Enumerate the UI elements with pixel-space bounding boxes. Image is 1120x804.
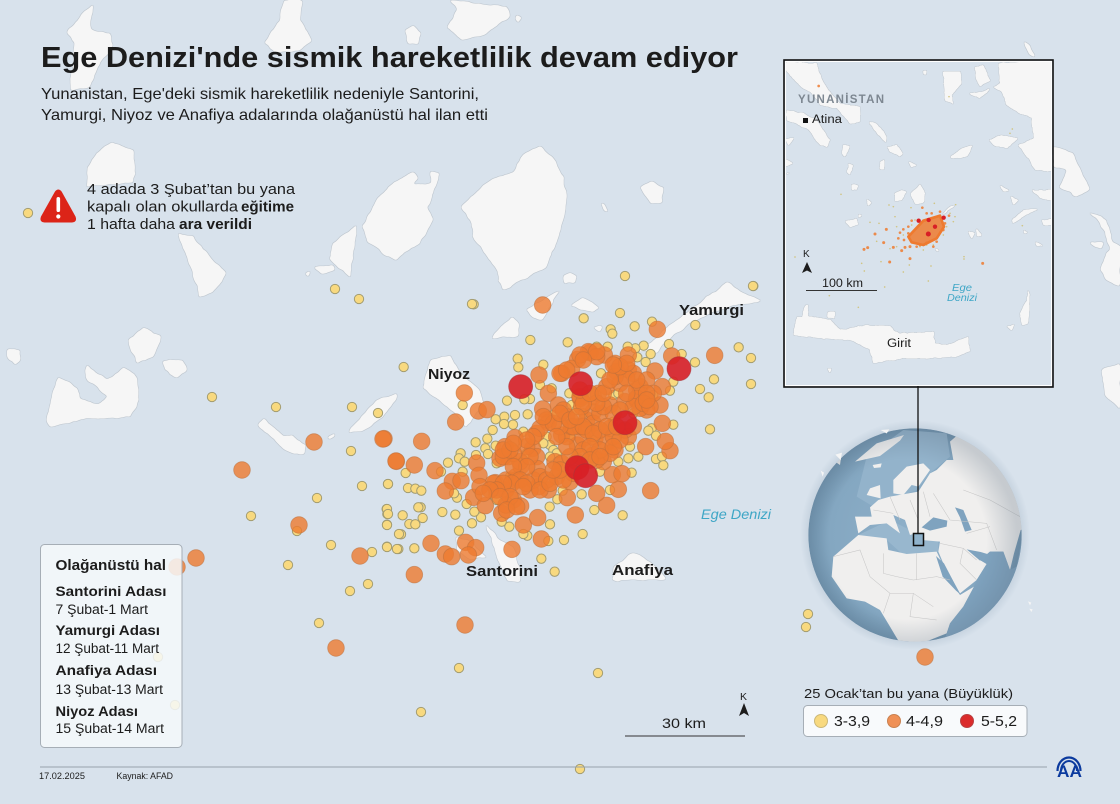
legend title: 25 Ocak’tan bu yana (Büyüklük) — [804, 686, 1013, 701]
inset label: Girit: Girit — [887, 338, 912, 350]
panel: emergency dates: 15 Şubat-14 Mart — [56, 721, 164, 736]
locator globe — [800, 420, 1033, 653]
inset scale bar: 100 km: 100 km — [822, 278, 863, 290]
earthquake dots: magnitude 3-3.9, outliers — [23, 208, 813, 774]
earthquake dots: magnitude 5-5.2 — [509, 357, 691, 488]
subtitle: Yunanistan, Ege'deki sismik hareketlilik nedeniyle Santorini, — [41, 86, 479, 103]
island labels — [428, 302, 744, 580]
earthquake dots: magnitude 4-4.9, outliers — [169, 431, 933, 665]
island labels: Niyoz — [428, 366, 470, 383]
date: 17.02.2025 — [39, 771, 85, 781]
logo: Anadolu Agency: AA — [1057, 762, 1082, 781]
inset sea label — [947, 283, 978, 304]
title: Ege Denizi'nde sismik hareketlilik devam ediyor — [41, 42, 738, 74]
panel: emergency dates: Olağanüstü hal — [56, 558, 166, 574]
icon: warning triangle — [40, 190, 76, 222]
inset map panel — [784, 60, 1057, 387]
sea label: Ege Denizi: Ege Denizi — [701, 506, 772, 522]
panel: emergency dates: Yamurgi Adası — [56, 622, 160, 638]
callout: school closure note: eğitime — [241, 198, 294, 216]
footer rule — [40, 766, 1047, 768]
inset label: Atina: Atina — [812, 114, 843, 126]
inset sea label: Ege — [952, 283, 972, 294]
legend: 5-5,2 — [981, 713, 1017, 730]
callout: school closure note — [87, 181, 296, 233]
globe locator square — [914, 534, 924, 546]
callout: school closure note: ara verildi — [179, 216, 252, 233]
subtitle — [41, 86, 488, 124]
legend — [804, 706, 1027, 736]
subtitle: Yamurgi, Niyoz ve Anafiya adalarında olağanüstü hal ilan etti — [41, 107, 488, 124]
panel: emergency dates: Santorini Adası — [56, 583, 166, 599]
scale bar: 30 km with north arrow: K — [740, 691, 747, 703]
inset sea label: Denizi — [947, 293, 978, 304]
scale bar: 30 km with north arrow — [625, 691, 749, 736]
island labels: Anafiya — [612, 562, 674, 579]
inset label: Atina — [803, 114, 843, 126]
panel: emergency dates: 12 Şubat-11 Mart — [56, 641, 159, 656]
scale bar: 30 km with north arrow: 30 km — [662, 715, 706, 731]
panel: emergency dates: 13 Şubat-13 Mart — [56, 682, 163, 697]
panel: emergency dates: Niyoz Adası — [56, 703, 138, 719]
inset: orange earthquake cluster — [817, 85, 984, 265]
main map: islands — [7, 0, 1120, 582]
island labels: Santorini — [466, 563, 538, 580]
panel: emergency dates: 7 Şubat-1 Mart — [56, 602, 148, 617]
legend: 3-3,9 — [834, 713, 870, 730]
inset: small magnitude dots — [794, 96, 1023, 308]
panel: emergency dates: Anafiya Adası — [56, 662, 157, 678]
earthquake dots: magnitude 3-3.9 — [382, 281, 758, 576]
callout: school closure note: kapalı olan okullarda — [87, 198, 239, 216]
inset: red earthquake dots — [916, 215, 946, 236]
inset label: Yunanistan: YUNANİSTAN — [798, 93, 884, 106]
connector line from inset to globe — [917, 386, 919, 535]
callout: school closure note: 1 hafta daha — [87, 216, 176, 233]
panel: emergency dates — [40, 544, 182, 748]
island labels: Yamurgi — [679, 302, 744, 319]
earthquake dots: magnitude 4-4.9 — [376, 297, 723, 583]
inset north arrow — [802, 249, 812, 273]
inset scale bar: 100 km — [806, 278, 877, 290]
legend: 4-4,9 — [906, 713, 943, 730]
callout: school closure note: 4 adada 3 Şubat’tan bu yana — [87, 181, 296, 198]
source: Kaynak: AFAD — [116, 771, 173, 781]
inset north arrow: K — [803, 249, 810, 260]
